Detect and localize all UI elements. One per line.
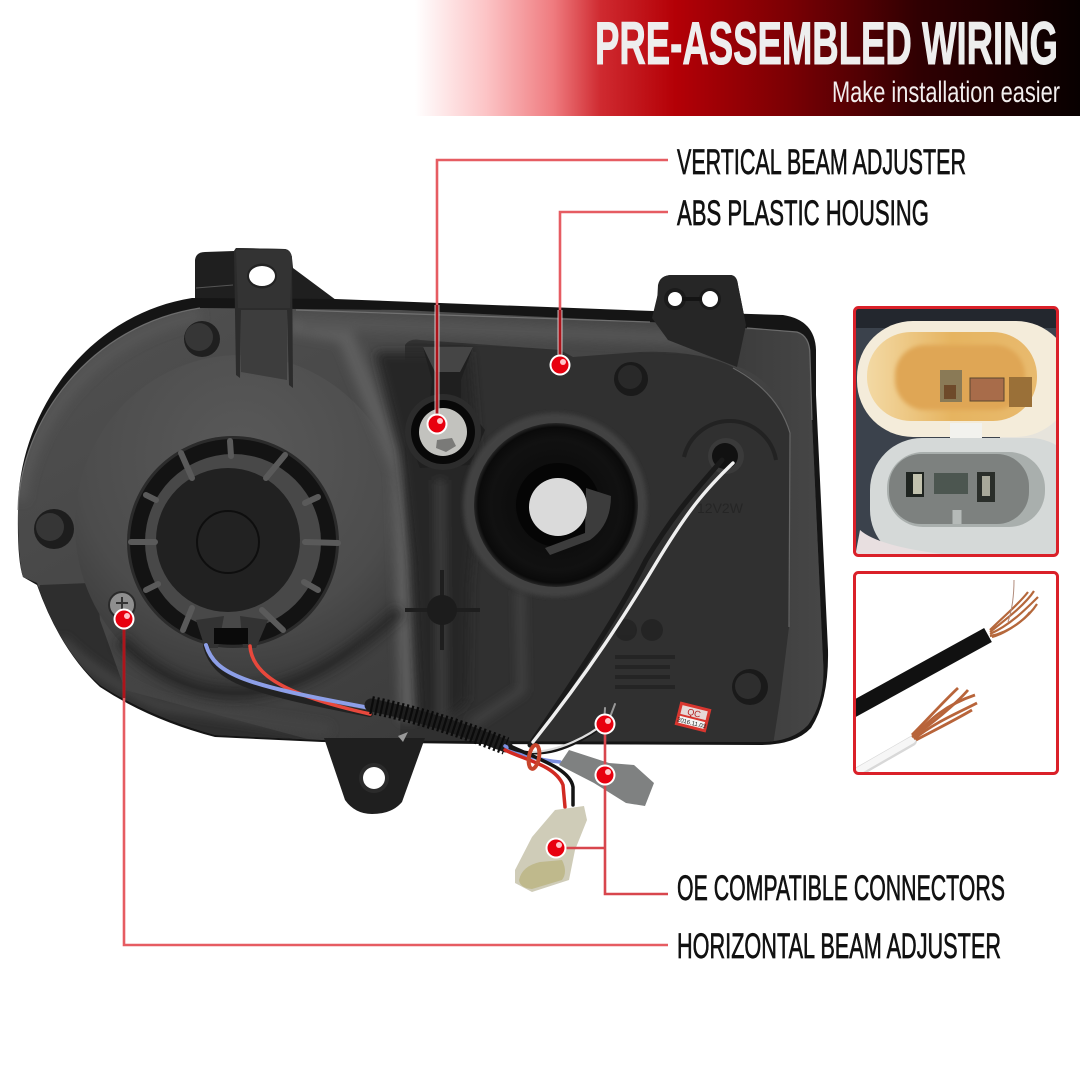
marker dots [114,354,616,858]
dome lower shadow [120,610,400,693]
white wire [858,740,912,772]
lower mounting bracket [324,732,425,814]
grey plug [870,438,1056,554]
QC label [675,701,711,733]
wire grommet and arc [684,421,776,474]
header banner [405,0,1080,116]
leader: OE compatible connectors [556,723,668,894]
cream connector [515,806,587,892]
blue and red bulb wires [206,645,370,714]
screw: horizontal adjuster [109,592,135,618]
ridge highlights [20,315,730,730]
white and black lamp wire [530,460,733,745]
black wire strands [990,580,1038,637]
panel: wire photo [850,572,1058,774]
corrugated loom [371,705,506,746]
QC label: QC [686,707,702,720]
leader: horizontal beam adjuster [124,619,668,945]
callout leader lines [124,160,668,945]
grey connector [559,750,654,806]
bolt [732,669,768,705]
white wire strands [912,688,977,740]
moulded marks: 12V2W [697,500,744,516]
cross moulding [405,570,480,650]
moulded marks [615,500,744,689]
leader: vertical beam adjuster [437,160,668,424]
vertical adjuster socket [405,347,485,470]
headlight housing [0,248,840,892]
right flange [774,422,824,741]
right mounting tab back [655,275,747,370]
right mounting tab [652,275,746,367]
central channel [375,352,522,725]
QC label: 2016.11.03 [676,717,707,730]
tab between plugs [950,423,982,438]
connector pigtails [505,704,615,807]
face edge highlights [18,308,812,510]
rear body panel [400,340,790,745]
label: ABS plastic housing: ABS PLASTIC HOUSING [677,194,929,233]
cream plug [857,321,1072,437]
lower left lobe shade [39,583,306,739]
bolt [184,321,220,357]
leader: ABS plastic housing [560,212,668,365]
harness wires [206,460,733,807]
bolt [34,509,74,549]
bulb cap [127,436,339,648]
housing face [18,308,824,742]
bolt [614,362,648,396]
rear shell [18,298,828,745]
dome [85,380,386,614]
black wire [850,635,988,711]
wire plugs at bulb [196,616,268,648]
left mounting tab [196,248,293,388]
panel: connector photo [853,306,1059,557]
lens opening [463,413,647,597]
left mounting tab back [195,248,336,330]
